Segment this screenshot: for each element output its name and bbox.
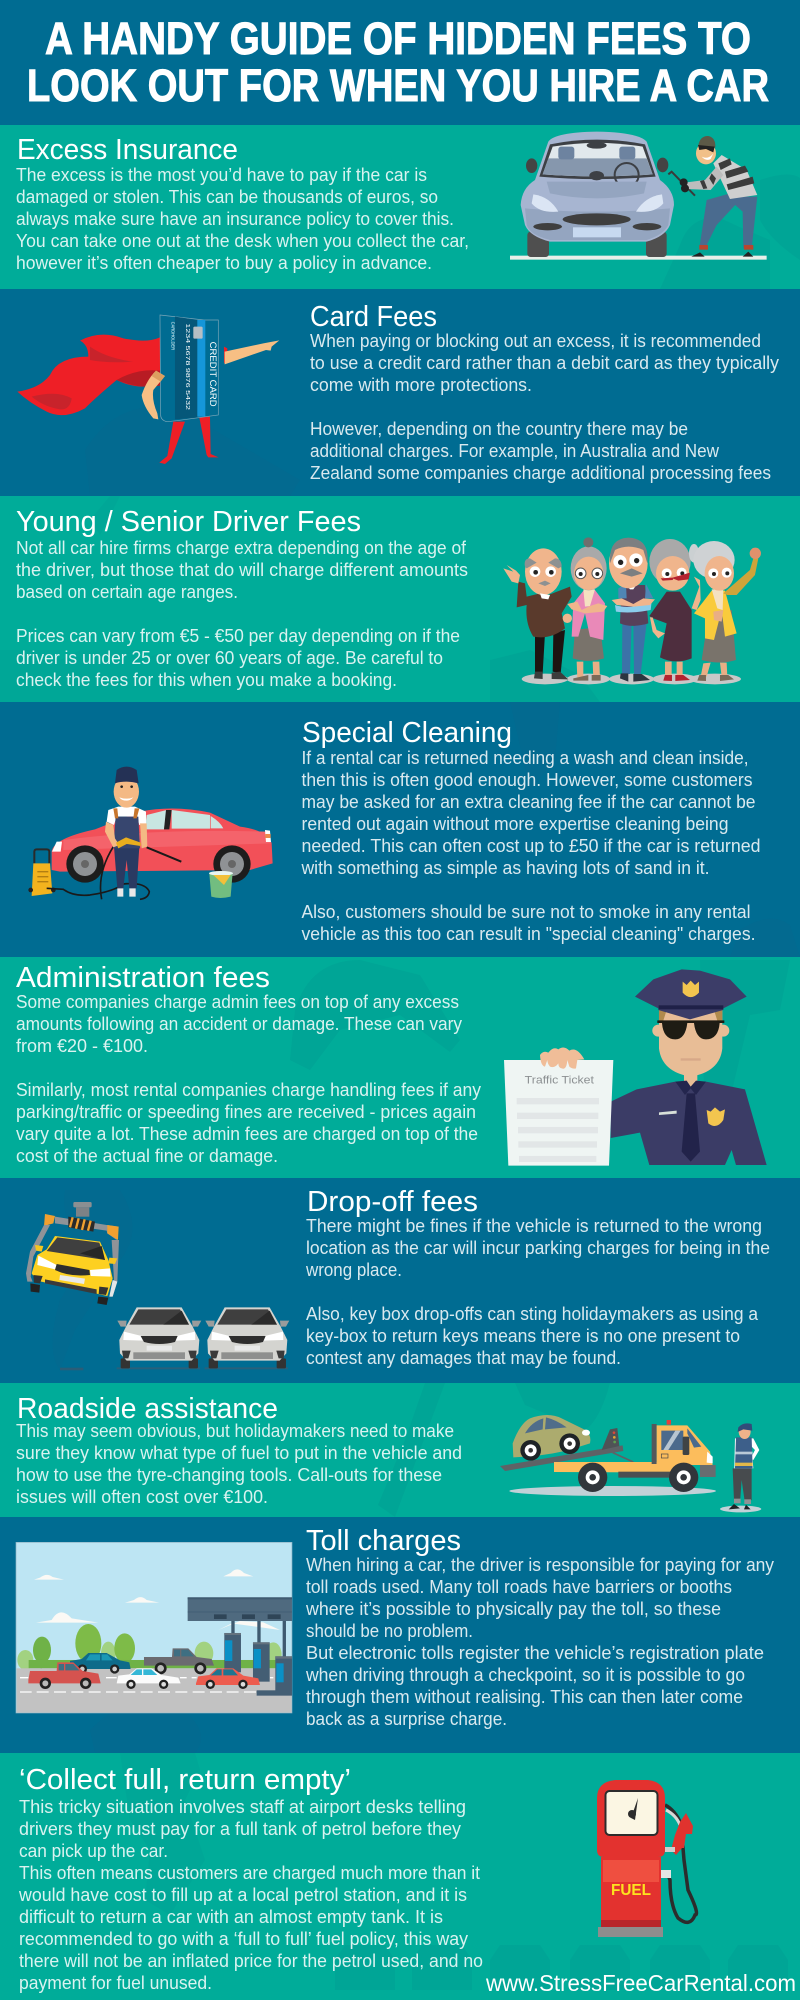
body text: there will not be an inflated price for the petrol used, and no [19, 1951, 483, 1971]
body text [305, 1216, 770, 1368]
body text: needed. This can often cost up to £50 if the car is returned [302, 836, 760, 856]
heading: Drop-off fees [307, 1186, 478, 1218]
body text: damaged or stolen. This can be thousands of euros, so [16, 187, 438, 207]
icon: car with thief [510, 132, 767, 260]
body text: may be asked for an extra cleaning fee if the car cannot be [302, 792, 756, 812]
body text: Not all car hire firms charge extra depending on the age of [16, 538, 467, 558]
body text: back as a surprise charge. [306, 1709, 507, 1729]
body text: cost of the actual fine or damage. [16, 1146, 278, 1166]
body text: vary quite a lot. These admin fees are charged on top of the [16, 1124, 478, 1144]
body text [16, 165, 469, 273]
panel: card fees [0, 289, 800, 496]
body text: This often means customers are charged much more than it [19, 1863, 480, 1883]
body text: parking/traffic or speeding fines are received - prices again [16, 1102, 476, 1122]
icon: yellow car on crane and two parked cars [26, 1202, 289, 1370]
icon: police officer with traffic ticket [504, 969, 767, 1166]
panel: toll charges [0, 1517, 800, 1753]
body text: There might be fines if the vehicle is returned to the wrong [306, 1216, 762, 1236]
body text: recommended to go with a ‘full to full’ fuel policy, this way [19, 1929, 468, 1949]
body text: When hiring a car, the driver is responsible for paying for any [306, 1555, 774, 1575]
icon: police officer with traffic ticket: Traffic Ticket [525, 1074, 595, 1086]
body text: payment for fuel unused. [19, 1973, 212, 1993]
body text [16, 1421, 462, 1507]
image: toll plaza illustration [16, 1542, 292, 1713]
body text: Zealand some companies charge additional processing fees [310, 463, 771, 483]
body text [310, 331, 779, 483]
body text [305, 1555, 774, 1729]
title [27, 13, 769, 111]
heading: Toll charges [306, 1525, 461, 1557]
body text: through them without realising. This can then later come [306, 1687, 743, 1707]
body text [16, 992, 481, 1166]
body text: You can take one out at the desk when you collect the car, [16, 231, 469, 251]
body text [16, 538, 468, 690]
body text: however it’s often cheaper to buy a policy in advance. [16, 253, 432, 273]
heading: Excess Insurance [17, 134, 238, 166]
panel: young and senior driver fees [0, 496, 800, 702]
body text: based on certain age ranges. [16, 582, 238, 602]
body text: This tricky situation involves staff at airport desks telling [19, 1797, 466, 1817]
body text: toll roads used. Many toll roads have barriers or booths [306, 1577, 732, 1597]
icon: credit card superhero: 1234 5678 9876 5432 [184, 323, 190, 410]
body text: to use a credit card rather than a debit card as they typically [310, 353, 779, 373]
body text: come with more protections. [310, 375, 532, 395]
icon: five senior people [503, 537, 761, 684]
heading: Roadside assistance [17, 1393, 278, 1425]
panel: administration fees [0, 957, 800, 1178]
body text: The excess is the most you’d have to pay if the car is [16, 165, 427, 185]
icon: credit card superhero [17, 315, 279, 464]
body text: Also, customers should be sure not to smoke in any rental [302, 902, 750, 922]
heading: Special Cleaning [302, 717, 512, 749]
body text: rented out again without more expertise cleaning being [302, 814, 728, 834]
body text: However, depending on the country there may be [310, 419, 688, 439]
body text: issues will often cost over €100. [16, 1487, 268, 1507]
icon: tow truck with car and driver [500, 1415, 761, 1512]
panel: collect full return empty [0, 1753, 800, 2000]
body text: vehicle as this too can result in "special cleaning" charges. [302, 924, 756, 944]
body text: check the fees for this when you make a booking. [16, 670, 397, 690]
body text: Similarly, most rental companies charge handling fees if any [16, 1080, 481, 1100]
body text: Also, key box drop-offs can sting holidaymakers as using a [306, 1304, 759, 1324]
body text: When paying or blocking out an excess, it is recommended [310, 331, 761, 351]
body text: contest any damages that may be found. [306, 1348, 621, 1368]
body text: from €20 - €100. [16, 1036, 148, 1056]
heading: Card Fees [310, 301, 437, 333]
heading: Administration fees [16, 962, 270, 994]
icon: red fuel pump [597, 1780, 696, 1937]
body text: can pick up the car. [19, 1841, 168, 1861]
panel: special cleaning [0, 702, 800, 957]
panel: drop-off fees [0, 1178, 800, 1383]
body text: location as the car will incur parking charges for being in the [306, 1238, 770, 1258]
body text: how to use the tyre-changing tools. Call-outs for these [16, 1465, 442, 1485]
body text: with something as simple as having lots of sand in it. [301, 858, 710, 878]
icon: credit card superhero: CREDIT CARD [208, 342, 218, 407]
body text: always make sure have an insurance policy to cover this. [16, 209, 454, 229]
body text: then this is often good enough. However, some customers [302, 770, 752, 790]
heading: Young / Senior Driver Fees [16, 506, 361, 538]
body text: additional charges. For example, in Australia and New [310, 441, 720, 461]
body text: would have cost to fill up at a local petrol station, and it is [18, 1885, 467, 1905]
body text: Prices can vary from €5 - €50 per day depending on if the [16, 626, 460, 646]
body text: Some companies charge admin fees on top of any excess [16, 992, 459, 1012]
body text: But electronic tolls register the vehicle’s registration plate [306, 1643, 764, 1663]
body text: should be no problem. [306, 1621, 473, 1641]
body text: wrong place. [305, 1260, 402, 1280]
icon: credit card superhero: CARDHOLDER [170, 322, 175, 350]
body text: where it’s possible to physically pay the toll, so these [305, 1599, 721, 1619]
body text [301, 748, 760, 944]
panel: roadside assistance [0, 1383, 800, 1517]
website url: www.StressFreeCarRental.com [485, 1970, 796, 1996]
body text: driver is under 25 or over 60 years of age. Be careful to [16, 648, 443, 668]
watermark silhouettes [335, 1945, 788, 1990]
body text: amounts following an accident or damage. These can vary [16, 1014, 462, 1034]
panel: page header [0, 0, 800, 125]
body text: This may seem obvious, but holidaymakers need to make [16, 1421, 454, 1441]
heading: ‘Collect full, return empty’ [19, 1764, 351, 1796]
body text: when driving through a checkpoint, so it is possible to go [305, 1665, 745, 1685]
body text [18, 1797, 483, 1993]
panel: excess insurance [0, 125, 800, 289]
icon: red fuel pump: FUEL [611, 1882, 651, 1899]
body text: drivers they must pay for a full tank of petrol before they [19, 1819, 461, 1839]
body text: difficult to return a car with an almost empty tank. It is [19, 1907, 443, 1927]
icon: man washing red car [28, 767, 273, 899]
body text: the driver, but those that do will charge different amounts [16, 560, 468, 580]
body text: sure they know what type of fuel to put in the vehicle and [16, 1443, 462, 1463]
body text: key-box to return keys means there is no one present to [306, 1326, 740, 1346]
body text: If a rental car is returned needing a wash and clean inside, [302, 748, 748, 768]
